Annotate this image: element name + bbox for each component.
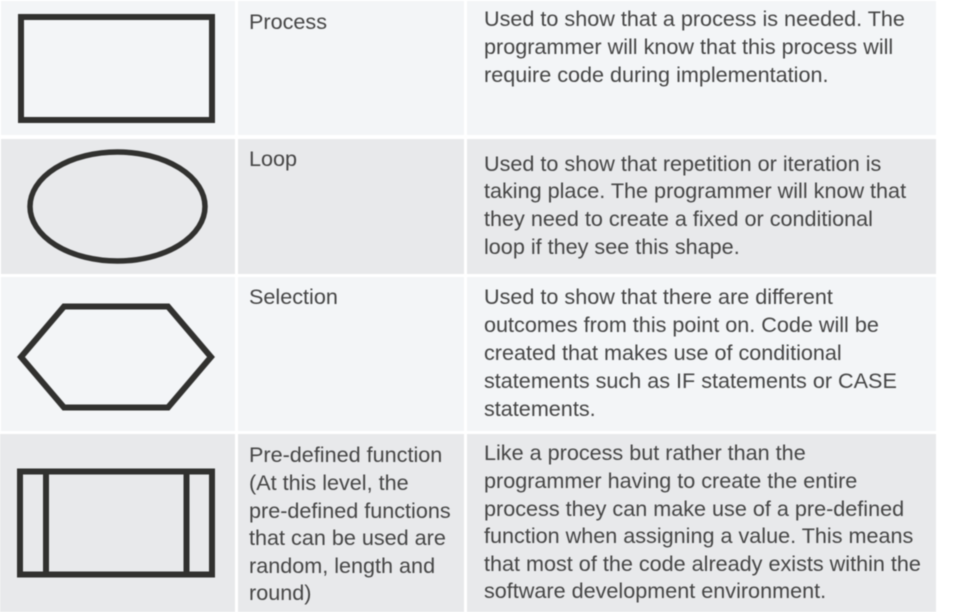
- description: selection: Used to show that there are different: [484, 284, 833, 309]
- description: process: programmer will know that this process will: [484, 34, 893, 59]
- label: process: Process: [249, 9, 327, 34]
- description: pre-defined function: [484, 440, 921, 603]
- description: selection: statements.: [484, 396, 596, 421]
- description: pre-defined function: that most of the code already exists within the: [484, 551, 921, 576]
- description: selection: [484, 284, 897, 421]
- label: pre-defined function: [249, 442, 451, 605]
- description: selection: statements such as IF statements or CASE: [484, 368, 897, 393]
- description: pre-defined function: process they can make use of a pre-defined: [484, 496, 904, 521]
- label: pre-defined function: pre-defined functions: [249, 498, 451, 523]
- description: pre-defined function: programmer having to create the entire: [484, 468, 857, 493]
- label: pre-defined function: random, length and: [249, 553, 435, 578]
- label: pre-defined function: Pre-defined function: [249, 442, 442, 467]
- description: selection: outcomes from this point on. Code will be: [484, 312, 879, 337]
- description: process: require code during implementation.: [484, 62, 828, 87]
- label: loop: Loop: [249, 146, 297, 171]
- description: loop: they need to create a fixed or conditional: [484, 206, 873, 231]
- description: loop: taking place. The programmer will know that: [484, 178, 906, 203]
- description: selection: created that makes use of conditional: [484, 340, 842, 365]
- description: loop: [484, 151, 906, 259]
- icon: process rectangle: [21, 17, 212, 120]
- panel: process row: [1, 1, 936, 135]
- panel: selection row: [1, 277, 936, 431]
- icon: selection hexagon: [21, 306, 211, 408]
- panel: loop row: [1, 139, 936, 274]
- label: selection: Selection: [249, 284, 338, 309]
- panel: pre-defined function row: [0, 434, 936, 612]
- description: loop: Used to show that repetition or iteration is: [484, 151, 881, 176]
- label: pre-defined function: round): [249, 580, 311, 605]
- description: pre-defined function: function when assigning a value. This means: [484, 523, 914, 548]
- label: pre-defined function: (At this level, the: [249, 470, 409, 495]
- icon: pre-defined function rectangle: [20, 471, 212, 575]
- description: pre-defined function: Like a process but rather than the: [484, 440, 806, 465]
- description: loop: loop if they see this shape.: [484, 234, 740, 259]
- icon: loop ellipse: [30, 152, 205, 261]
- description: process: [484, 6, 905, 87]
- label: pre-defined function: that can be used are: [249, 525, 446, 550]
- description: process: Used to show that a process is needed. The: [484, 6, 905, 31]
- description: pre-defined function: software development environment.: [484, 578, 826, 603]
